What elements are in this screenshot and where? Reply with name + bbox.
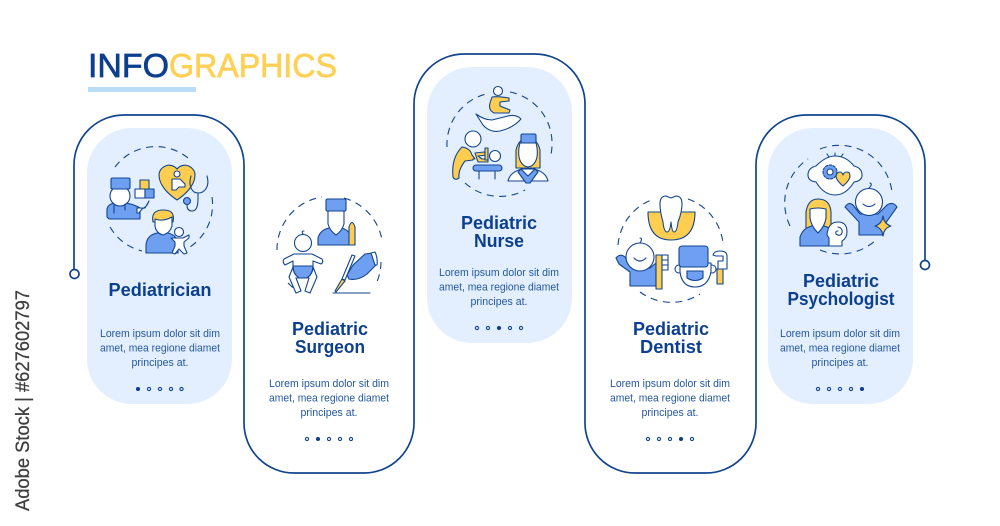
body text: Lorem ipsum dolor sit dim — [780, 328, 900, 340]
body text — [100, 328, 220, 369]
heading: Dentist — [640, 337, 702, 357]
body text: amet, mea regione diamet — [269, 392, 389, 404]
panel: Pediatric Surgeon — [269, 197, 389, 441]
heading: Pediatric — [292, 319, 368, 339]
panel: Pediatric Psychologist — [780, 145, 900, 391]
body text — [439, 267, 559, 308]
heading — [788, 271, 894, 309]
serpentine outline connecting the cards — [70, 54, 930, 473]
heading — [461, 213, 537, 251]
pagination dots — [475, 326, 523, 330]
title: INFO — [88, 47, 169, 84]
heading: Pediatric — [803, 271, 879, 291]
body text: amet, mea regione diamet — [100, 342, 220, 354]
body text: amet, mea regione diamet — [610, 392, 730, 404]
body text: amet, mea regione diamet — [780, 342, 900, 354]
body text: Lorem ipsum dolor sit dim — [439, 267, 559, 279]
icon: psychologist, mind and happy child — [785, 145, 897, 254]
title underline — [88, 87, 196, 92]
heading: Psychologist — [788, 289, 894, 309]
body text: Lorem ipsum dolor sit dim — [610, 378, 730, 390]
heading: Nurse — [474, 231, 524, 251]
panel: Pediatric Nurse — [439, 86, 559, 330]
title: GRAPHICS — [169, 47, 337, 84]
pagination dots — [646, 437, 694, 441]
body text: principes at. — [470, 296, 528, 308]
body text: principes at. — [300, 407, 358, 419]
icon: tooth, baby with toothbrush, dentist — [616, 196, 727, 302]
icon: nurse, hand holding baby, parent with baby — [447, 86, 552, 196]
icon: surgeon, baby and hand with scalpel — [277, 197, 382, 293]
body text — [780, 328, 900, 369]
heading — [292, 319, 368, 357]
body text: Lorem ipsum dolor sit dim — [100, 328, 220, 340]
pagination dots — [816, 387, 864, 391]
body text: amet, mea regione diamet — [439, 282, 559, 294]
heading: Surgeon — [295, 337, 365, 357]
heading: Pediatric — [633, 319, 709, 339]
icon: pediatrician group — [107, 147, 213, 254]
pagination dots — [305, 437, 353, 441]
pagination dots — [136, 387, 183, 391]
stock credit vertical text: Adobe Stock | #627602797 — [12, 290, 34, 511]
body text — [269, 378, 389, 419]
title — [88, 47, 337, 84]
heading: Pediatric — [461, 213, 537, 233]
body text: principes at. — [812, 357, 868, 369]
body text — [610, 378, 730, 419]
panel: Pediatric Dentist — [610, 196, 730, 441]
heading: Pediatrician — [108, 280, 212, 300]
heading — [633, 319, 709, 357]
panel backgrounds: cards 1, 3 and 5 — [87, 67, 913, 404]
panel: Pediatrician — [100, 147, 220, 391]
body text: principes at. — [642, 407, 698, 419]
body text: principes at. — [132, 357, 188, 369]
body text: Lorem ipsum dolor sit dim — [269, 378, 389, 390]
